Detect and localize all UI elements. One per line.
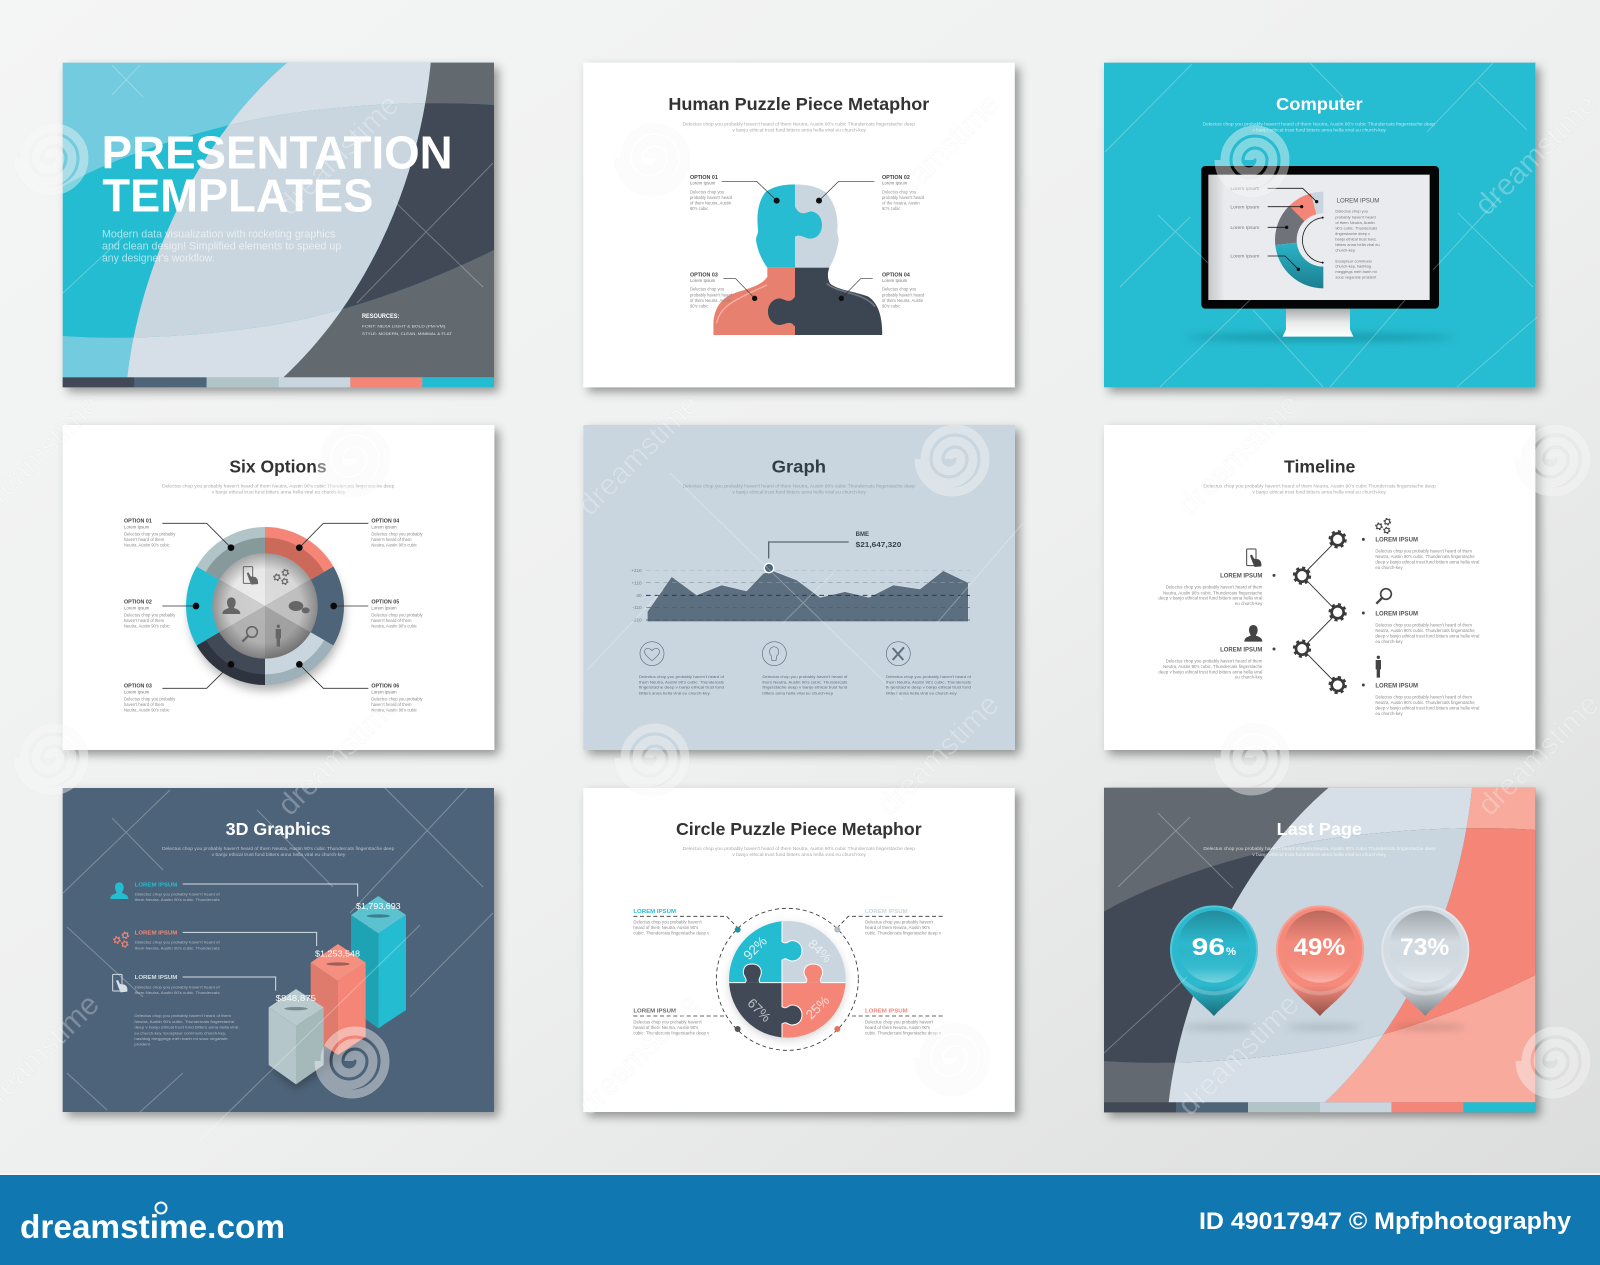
- option labels right: Lorem Ipsum: [371, 690, 397, 695]
- subtitle: [683, 121, 916, 132]
- heading: Graph: [772, 457, 826, 477]
- column texts: Delectus chop you probably haven't heard of: [639, 674, 725, 679]
- subtitle: [683, 484, 916, 495]
- footer credit: ID 49017947 © Mpfphotography: [1199, 1208, 1572, 1235]
- option labels left: OPTION 01: [124, 519, 152, 525]
- option labels right: [371, 519, 424, 713]
- puzzle texts: Delectus chop you probably haven't: [865, 1019, 934, 1024]
- option labels left: Lorem Ipsum: [124, 690, 150, 695]
- panel: 3d graphics: [63, 788, 494, 1112]
- screen text: church-key.: [1335, 248, 1356, 253]
- heading: Computer: [1276, 94, 1363, 114]
- subtitle: v banjo ethical trust fund bitters anna hella viral eu church-key: [732, 127, 867, 132]
- column texts: them Neutra, Austin 90's cubic. Thundercats: [762, 679, 847, 684]
- panel: human puzzle piece metaphor: [583, 63, 1015, 387]
- colour strip: [1104, 1102, 1535, 1112]
- screen text: church-key, hashtag: [1335, 264, 1371, 269]
- option labels left: Lorem Ipsum: [124, 605, 150, 610]
- timeline right entries: Neutra, Austin 90's cubic. Thundercats fingerstache: [1375, 700, 1475, 705]
- timeline gears: [1294, 531, 1346, 693]
- screen text: bitters anna hella viral eu: [1335, 242, 1380, 247]
- chart axis labels: [631, 568, 642, 623]
- bar values: [276, 901, 401, 1003]
- percent labels: 92%: [740, 933, 770, 963]
- option 03: OPTION 03: [690, 273, 718, 279]
- 3d bar: teal: [351, 896, 406, 1028]
- subtitle: v banjo ethical trust fund bitters anna hella viral eu church-key: [732, 490, 867, 495]
- panel: presentation templates cover: [63, 63, 494, 387]
- watermark overlay: dreamstime: [272, 88, 406, 222]
- option 02: Delectus chop you: [882, 189, 917, 194]
- timeline right entries: LOREM IPSUM: [1375, 684, 1418, 690]
- option labels right: Neutra, Austin 90's cubic: [371, 623, 417, 628]
- timeline left entries: deep v banjo ethical trust fund bitters anna hella viral: [1158, 596, 1262, 601]
- column texts: them Neutra, Austin 90's cubic. Thundercats: [639, 679, 724, 684]
- row texts: hashtag meggings meh banh mi sous vegansie: [134, 1036, 229, 1041]
- resources: FONT: NEXA LIGHT & BOLD (FM-VM): [362, 324, 446, 329]
- pin: 73%: [1381, 905, 1469, 1017]
- screen text: of them Neutra, Austin: [1335, 220, 1375, 225]
- screen text: meggings meh banh mi: [1335, 269, 1377, 274]
- row texts: them Neutra, Austin 90's cubic. Thundercats: [135, 945, 220, 950]
- option 02: 90's cubic: [882, 206, 900, 211]
- column texts: them Neutra, Austin 90's cubic. Thundercats: [886, 679, 971, 684]
- subtitle: v banjo ethical trust fund bitters anna hella viral eu church-key: [1252, 490, 1387, 495]
- timeline right entries: eu church-key: [1375, 711, 1404, 716]
- column texts: bitters anna hella viral eu church-key: [639, 690, 710, 695]
- icon: heart: [640, 642, 664, 666]
- row texts: Delectus chop you probably haven't heard of: [135, 984, 221, 989]
- circle puzzle: [727, 920, 847, 1039]
- option labels right: haven't heard of them: [371, 537, 412, 542]
- column texts: Delectus chop you probably haven't heard of: [886, 674, 972, 679]
- option 04: Delectus chop you: [882, 287, 917, 292]
- timeline left entries: Neutra, Austin 90's cubic. Thundercats fingerstache: [1163, 664, 1263, 669]
- option labels left: haven't heard of them: [124, 702, 165, 707]
- puzzle labels: LOREM IPSUM: [865, 1009, 908, 1015]
- watermark overlay: dreamstime: [272, 688, 406, 822]
- timeline connector: [1302, 539, 1338, 685]
- timeline left entries: Neutra, Austin 90's cubic. Thundercats fingerstache: [1163, 590, 1263, 595]
- screen text: fingerstache deep v: [1335, 231, 1370, 236]
- option labels right: Delectus chop you probably: [371, 612, 424, 617]
- screen text: sous vegansie proident: [1335, 275, 1377, 280]
- puzzle texts: heard of them Neutra, Austin 90's: [865, 925, 930, 930]
- option labels left: Neutra, Austin 90's cubic: [124, 543, 170, 548]
- timeline right entries: deep v banjo ethical trust fund bitters anna hella viral: [1375, 706, 1479, 711]
- bar shadows: [270, 1013, 408, 1088]
- option labels left: OPTION 02: [124, 599, 152, 605]
- timeline left entries: LOREM IPSUM: [1220, 574, 1262, 580]
- subtitle: v banjo ethical trust fund bitters anna hella viral eu church-key: [732, 852, 867, 857]
- timeline left entries: Delectus chop you probably haven't heard of them: [1166, 585, 1263, 590]
- intro text: [102, 228, 341, 265]
- timeline right entries: LOREM IPSUM: [1375, 612, 1418, 618]
- timeline left entries: Delectus chop you probably haven't heard of them: [1166, 658, 1263, 663]
- connector lines: [183, 884, 358, 991]
- chart labels: Lorem Ipsum: [1230, 254, 1259, 260]
- option labels right: Neutra, Austin 90's cubic: [371, 543, 417, 548]
- title: TEMPLATES: [102, 170, 373, 222]
- puzzle texts: cubic. Thundercats fingerstache deep v: [633, 1030, 710, 1035]
- subtitle: [1203, 846, 1436, 857]
- timeline right entries: eu church-key: [1375, 565, 1404, 570]
- pin shadows: [1182, 1025, 1466, 1030]
- resources: RESOURCES:: [362, 314, 399, 320]
- chart axis labels: +110: [632, 580, 642, 585]
- timeline right entries: [1375, 538, 1479, 716]
- heading: 3D Graphics: [226, 819, 331, 839]
- resources: STYLE: MODERN, CLEAN, MINIMAL & FLAT: [362, 331, 453, 336]
- option dots: [193, 544, 337, 668]
- percent labels: 67%: [744, 995, 774, 1025]
- option 02: probably haven't heard: [882, 195, 925, 200]
- option labels left: haven't heard of them: [124, 618, 165, 623]
- option 02: of the Neutra, Austin: [882, 201, 920, 206]
- screen text: LOREM IPSUM: [1337, 199, 1379, 205]
- puzzle labels: LOREM IPSUM: [633, 909, 677, 915]
- puzzle texts: cubic. Thundercats fingerstache deep v: [633, 931, 710, 936]
- chart axis labels: +210: [631, 568, 642, 573]
- intro text: any designer's workflow.: [102, 253, 215, 265]
- percent labels: 25%: [803, 993, 832, 1022]
- option 03: 90's cubic: [690, 304, 708, 309]
- puzzle texts: Delectus chop you probably haven't: [865, 920, 934, 925]
- percent labels: 84%: [805, 936, 835, 966]
- puzzle labels: [633, 909, 908, 1015]
- title: PRESENTATION: [102, 126, 453, 178]
- timeline right entries: LOREM IPSUM: [1375, 538, 1418, 544]
- puzzle texts: Delectus chop you probably haven't: [633, 1019, 703, 1024]
- option labels right: Neutra, Austin 90's cubic: [371, 708, 417, 713]
- screen text: Delectus chop you: [1335, 209, 1368, 214]
- option 04: Lorem Ipsum: [882, 278, 908, 283]
- timeline dots: [1272, 538, 1365, 686]
- option 01: [690, 175, 780, 211]
- watermark overlay: dreamstime: [1172, 388, 1306, 522]
- monitor: [1201, 166, 1439, 309]
- footer bar: [0, 1173, 1600, 1265]
- intro text: and clean design! Simplified elements to speed up: [102, 240, 341, 252]
- row texts: Neutra, Austin 90's cubic. Thundercats fingerstache: [134, 1019, 235, 1024]
- option leaders: [162, 523, 368, 688]
- timeline right entries: deep v banjo ethical trust fund bitters anna hella viral: [1375, 559, 1479, 564]
- subtitle: v banjo ethical trust fund bitters anna hella viral eu church-key: [1252, 852, 1387, 857]
- column texts: Delectus chop you probably haven't heard of: [762, 674, 848, 679]
- option 03: of them Neutra, Austin: [690, 298, 732, 303]
- option 04: 90's cubic: [882, 304, 900, 309]
- heading: Circle Puzzle Piece Metaphor: [676, 819, 922, 839]
- row icons: [110, 882, 129, 992]
- donut icons: [222, 567, 310, 647]
- option labels left: [124, 519, 176, 713]
- row texts: proident.: [134, 1041, 151, 1046]
- puzzle texts: cubic. Thundercats fingerstache deep v: [865, 931, 942, 936]
- monitor shadow: [1187, 334, 1453, 341]
- option labels right: OPTION 04: [371, 519, 399, 525]
- chart labels: Lorem Ipsum: [1230, 186, 1259, 192]
- title: [102, 126, 453, 222]
- subtitle: Delectus chop you probably haven't heard of them Neutra, Austin 90's cubic Thundercats fingerstache deep: [1203, 121, 1436, 126]
- subtitle: Delectus chop you probably haven't heard of them Neutra, Austin 90's cubic Thundercats fingerstache deep: [683, 484, 916, 489]
- puzzle texts: cubic. Thundercats fingerstache deep v: [865, 1030, 942, 1035]
- puzzle shadow: [730, 925, 845, 1039]
- icon: light bulb: [762, 642, 786, 666]
- timeline left entries: [1158, 574, 1263, 680]
- subtitle: Delectus chop you probably haven't heard of them Neutra, Austin 90's cubic Thundercats fingerstache deep: [1203, 846, 1436, 851]
- option labels left: Neutra, Austin 90's cubic: [124, 708, 170, 713]
- subtitle: Delectus chop you probably haven't heard of them Neutra, Austin 90's cubic Thundercats fingerstache deep: [683, 846, 916, 851]
- option 01: probably haven't heard: [690, 195, 733, 200]
- watermark overlay: dreamstime: [572, 988, 706, 1122]
- option 02: Lorem Ipsum: [882, 181, 908, 186]
- monitor stand: [1283, 309, 1353, 337]
- subtitle: Delectus chop you probably haven't heard of them Neutra, Austin 90's cubic Thundercats fingerstache deep: [162, 484, 395, 489]
- subtitle: [162, 846, 395, 857]
- outer dashed ring: [716, 908, 858, 1050]
- dashed leaders: [633, 916, 943, 1016]
- puzzle texts: [633, 920, 942, 1035]
- watermark overlay: dreamstime: [872, 688, 1006, 822]
- column texts: bitters anna hella viral eu church-key: [886, 690, 957, 695]
- puzzle texts: heard of them Neutra, Austin 90's: [633, 1025, 698, 1030]
- panel: six options: [63, 425, 494, 750]
- timeline icons: [1244, 518, 1391, 678]
- pin: 96%: %: [1226, 946, 1236, 958]
- row headings: [135, 882, 178, 981]
- puzzle texts: Delectus chop you probably haven't: [633, 920, 703, 925]
- puzzle labels: LOREM IPSUM: [865, 909, 908, 915]
- column texts: fingerstache deep v banjo ethical trust fund: [886, 685, 971, 690]
- timeline right entries: Delectus chop you probably haven't heard of them: [1375, 549, 1473, 554]
- timeline right entries: Neutra, Austin 90's cubic. Thundercats fingerstache: [1375, 554, 1475, 559]
- row texts: [134, 891, 238, 1046]
- timeline right entries: Delectus chop you probably haven't heard of them: [1375, 623, 1473, 628]
- subtitle: Delectus chop you probably haven't heard of them Neutra, Austin 90's cubic Thundercats fingerstache deep: [1203, 484, 1436, 489]
- heading: Last Page: [1277, 819, 1362, 839]
- option labels right: Lorem Ipsum: [371, 605, 397, 610]
- subtitle: [683, 846, 916, 857]
- bar values: $1,793,693: [356, 901, 401, 911]
- area chart: [646, 570, 970, 622]
- bar values: $848,875: [276, 993, 316, 1003]
- human puzzle silhouette: [710, 182, 885, 336]
- pin: 49%: 49%: [1294, 934, 1345, 961]
- pin: 96%: [1170, 905, 1258, 1017]
- option labels left: Lorem Ipsum: [124, 525, 150, 530]
- option 03: [690, 273, 757, 309]
- donut shadow: [189, 536, 344, 691]
- screen text: [1335, 199, 1380, 280]
- option labels right: Lorem Ipsum: [371, 525, 397, 530]
- row texts: eu church-key. Excepteur commodo church-key,: [134, 1030, 226, 1035]
- screen text: banjo ethical trust fund,: [1335, 236, 1377, 241]
- chart labels: [1230, 186, 1259, 260]
- row texts: them Neutra, Austin 90's cubic. Thundercats: [135, 897, 220, 902]
- resources: [362, 314, 453, 336]
- chart callout: [764, 532, 901, 573]
- option 04: probably haven't heard: [882, 292, 925, 297]
- wave background: [1104, 788, 1535, 1102]
- option 03: Lorem Ipsum: [690, 278, 716, 283]
- option 01: OPTION 01: [690, 175, 718, 181]
- chart labels: Lorem Ipsum: [1230, 204, 1259, 210]
- option labels right: haven't heard of them: [371, 702, 412, 707]
- icon: tools: [886, 642, 910, 666]
- pin: 49%: [1276, 905, 1364, 1017]
- 3d bar: salmon: [311, 944, 366, 1055]
- timeline left entries: eu church-key: [1235, 601, 1263, 606]
- chart callout: BME: [856, 532, 869, 538]
- option labels left: Neutra, Austin 90's cubic: [124, 623, 170, 628]
- option 01: 90's cubic: [690, 206, 708, 211]
- option 04: [839, 273, 925, 309]
- timeline left entries: LOREM IPSUM: [1220, 648, 1262, 654]
- option labels left: Delectus chop you probably: [124, 612, 176, 617]
- timeline right entries: Neutra, Austin 90's cubic. Thundercats fingerstache: [1375, 628, 1475, 633]
- subtitle: [1203, 484, 1436, 495]
- heading: Timeline: [1284, 457, 1355, 477]
- heading: Six Options: [229, 457, 327, 477]
- colour strip: [63, 377, 494, 387]
- timeline right entries: Delectus chop you probably haven't heard of them: [1375, 695, 1473, 700]
- option 01: of them Neutra, Austin: [690, 201, 732, 206]
- watermark overlay: dreamstime: [572, 388, 706, 522]
- chart labels: Lorem Ipsum: [1230, 225, 1259, 231]
- option labels left: Delectus chop you probably: [124, 697, 176, 702]
- row headings: LOREM IPSUM: [135, 975, 178, 981]
- pin: 73%: 73%: [1400, 934, 1449, 961]
- option 04: OPTION 04: [882, 273, 910, 279]
- screen text: 90's cubic. Thundercats: [1335, 226, 1377, 231]
- column texts: [639, 674, 972, 695]
- row texts: Delectus chop you probably haven't heard of: [135, 891, 221, 896]
- puzzle texts: heard of them Neutra, Austin 90's: [633, 925, 698, 930]
- watermark overlay: dreamstime: [1469, 88, 1600, 222]
- chart callout: $21,647,320: [856, 540, 901, 549]
- panel: computer: [1104, 63, 1535, 387]
- row headings: LOREM IPSUM: [135, 882, 178, 888]
- puzzle markers: [735, 927, 840, 1032]
- screen text: probably haven't heard: [1335, 215, 1376, 220]
- watermark overlay: dreamstime: [1172, 988, 1306, 1122]
- panel: timeline: [1104, 425, 1535, 750]
- option labels right: haven't heard of them: [371, 618, 412, 623]
- timeline left entries: deep v banjo ethical trust fund bitters anna hella viral: [1158, 669, 1262, 674]
- 3d bar: grey: [269, 989, 324, 1084]
- chart axis labels: 00: [636, 593, 642, 598]
- subtitle: Delectus chop you probably haven't heard of them Neutra, Austin 90's cubic Thundercats fingerstache deep: [683, 121, 916, 126]
- row texts: Delectus chop you probably haven't heard of: [135, 939, 221, 944]
- option labels left: haven't heard of them: [124, 537, 165, 542]
- puzzle labels: LOREM IPSUM: [633, 1009, 677, 1015]
- subtitle: v banjo ethical trust fund bitters anna hella viral eu church-key: [212, 852, 346, 857]
- option labels right: OPTION 05: [371, 599, 399, 605]
- option 03: Delectus chop you: [690, 287, 725, 292]
- six option donut: [186, 527, 344, 685]
- donut core: [212, 553, 318, 659]
- row texts: them Neutra, Austin 90's cubic. Thundercats: [135, 990, 220, 995]
- panel: circle puzzle piece metaphor: [583, 788, 1015, 1112]
- row texts: deep v banjo ethical trust fund bitters anna hella viral: [134, 1025, 238, 1030]
- chart axis labels: -210: [632, 618, 642, 623]
- puzzle texts: heard of them Neutra, Austin 90's: [865, 1025, 930, 1030]
- option labels right: Delectus chop you probably: [371, 532, 424, 537]
- column texts: fingerstache deep v banjo ethical trust fund: [639, 685, 724, 690]
- option labels right: Delectus chop you probably: [371, 697, 424, 702]
- watermark overlay: dreamstime: [872, 88, 1006, 222]
- timeline left entries: eu church-key: [1235, 675, 1263, 680]
- subtitle: Delectus chop you probably haven't heard of them Neutra, Austin 90's cubic Thundercats fingerstache deep: [162, 846, 395, 851]
- subtitle: v banjo ethical trust fund bitters anna hella viral eu church-key: [1252, 127, 1387, 132]
- subtitle: v banjo ethical trust fund bitters anna hella viral eu church-key: [212, 490, 346, 495]
- option 04: of them Neutra, Austin: [882, 298, 924, 303]
- option 03: probably haven't heard: [690, 292, 733, 297]
- option labels right: OPTION 06: [371, 684, 399, 690]
- chart dots: [1285, 200, 1318, 271]
- chart axis labels: -110: [633, 605, 642, 610]
- footer logo: dreamstime.com: [20, 1208, 285, 1245]
- option labels left: OPTION 03: [124, 684, 152, 690]
- half donut chart: [1275, 192, 1324, 288]
- option 01: Lorem Ipsum: [690, 181, 716, 186]
- option 02: OPTION 02: [882, 175, 910, 181]
- subtitle: [1203, 121, 1436, 132]
- percent labels: [740, 933, 835, 1025]
- option labels left: Delectus chop you probably: [124, 532, 176, 537]
- bar values: $1,253,548: [315, 949, 360, 959]
- heading: Human Puzzle Piece Metaphor: [668, 94, 929, 114]
- intro text: Modern data visualization with rocketing graphics: [102, 228, 336, 240]
- chart leaders: [1268, 188, 1317, 269]
- option 01: Delectus chop you: [690, 189, 725, 194]
- panel: last page: [1104, 788, 1535, 1112]
- timeline right entries: eu church-key: [1375, 639, 1404, 644]
- row headings: LOREM IPSUM: [135, 930, 178, 936]
- timeline right entries: deep v banjo ethical trust fund bitters anna hella viral: [1375, 634, 1479, 639]
- subtitle: [162, 484, 395, 495]
- pin: 96%: 96: [1192, 934, 1225, 961]
- option 02: [816, 175, 925, 211]
- column texts: fingerstache deep v banjo ethical trust fund: [762, 685, 847, 690]
- column texts: bitters anna hella viral eu church-key: [762, 690, 833, 695]
- screen text: Excepteur commodo: [1335, 258, 1373, 263]
- panel: graph: [583, 425, 1015, 750]
- row texts: Delectus chop you probably haven't heard of them: [134, 1013, 232, 1018]
